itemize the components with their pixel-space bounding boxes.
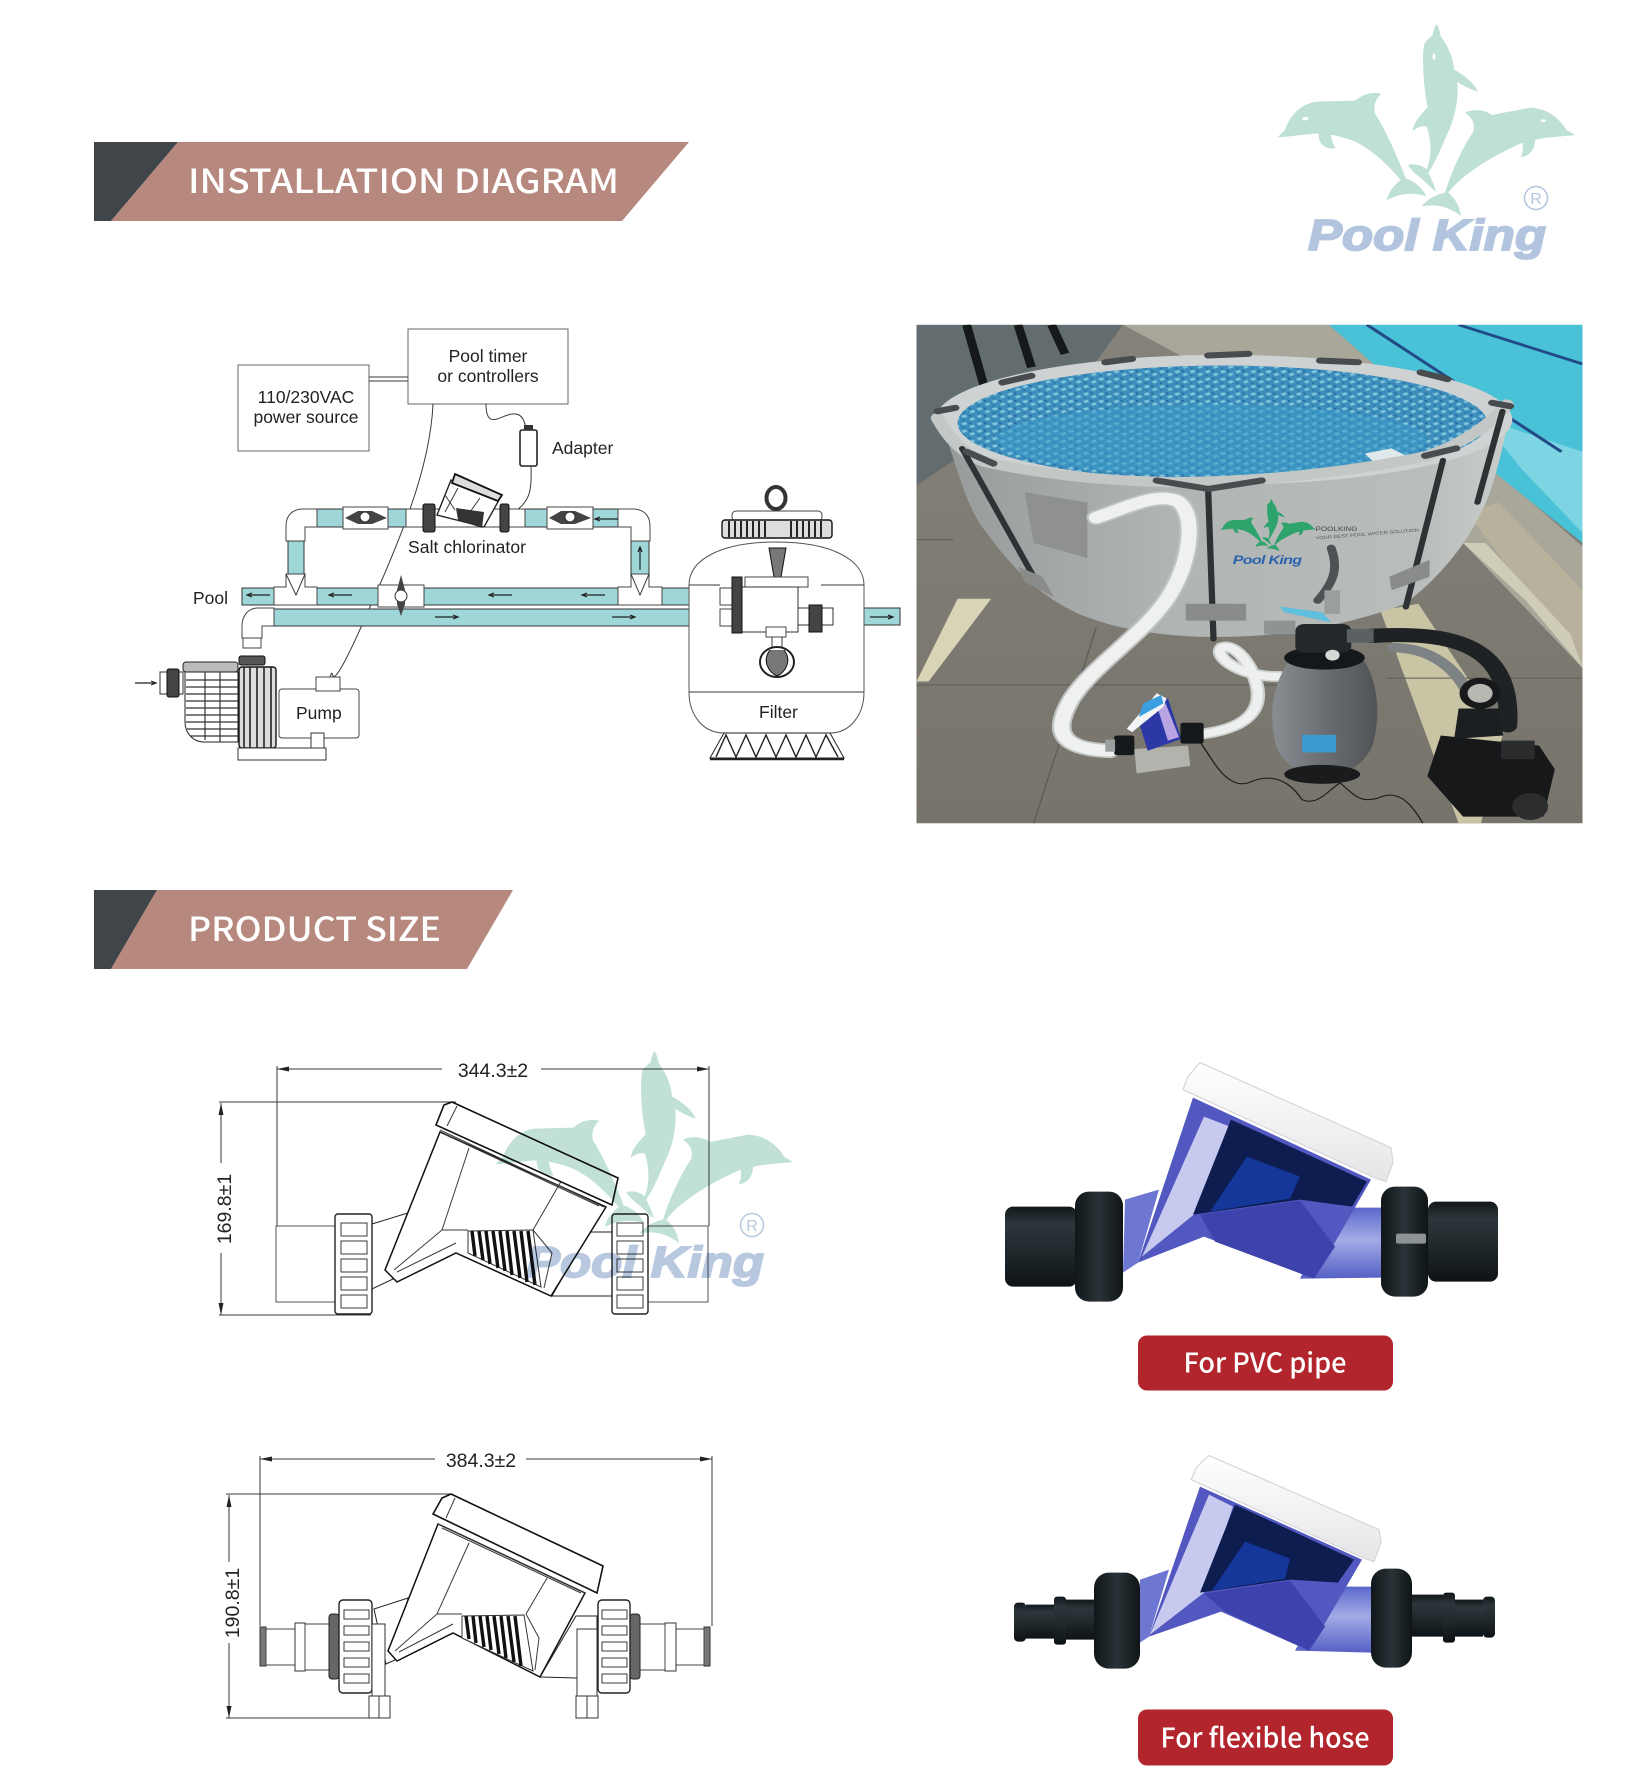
width dimension xyxy=(277,1060,709,1226)
adapter xyxy=(517,425,613,510)
product photo: PVC pipe version xyxy=(1005,1063,1498,1302)
pump: Pump xyxy=(296,703,342,723)
pump in photo xyxy=(1427,678,1555,820)
box: pool timer or controllers xyxy=(408,329,568,404)
watermark: Pool King logo over drawing: R xyxy=(746,1218,758,1235)
label: for flexible hose xyxy=(1138,1710,1393,1766)
flow arrows xyxy=(135,517,893,685)
dimension drawing: flexible hose version xyxy=(222,1450,712,1718)
hoses xyxy=(1062,498,1508,751)
filter xyxy=(689,487,864,759)
salt chlorinator in photo xyxy=(1105,693,1204,773)
icon: three dolphins xyxy=(1277,24,1575,216)
dimension drawing: PVC pipe version xyxy=(214,1060,709,1315)
pool water xyxy=(958,366,1487,480)
height dimension xyxy=(222,1494,451,1718)
filter: Filter xyxy=(759,702,798,722)
label: for flexible hose: For flexible hose xyxy=(1160,1716,1370,1756)
box: pool timer or controllers: Pool timer xyxy=(449,346,528,366)
small salt chlorinator: Salt chlorinator xyxy=(408,537,526,557)
installation schematic xyxy=(135,329,900,760)
valves xyxy=(343,507,593,616)
watermark: Pool King logo over drawing xyxy=(495,1051,793,1287)
product outline xyxy=(276,1102,708,1314)
pool rim back xyxy=(935,355,1512,485)
pool wall xyxy=(946,408,1510,637)
wire: controller to adapter xyxy=(486,404,526,430)
box: power source: 110/230VAC xyxy=(258,387,354,407)
logo on pool wall xyxy=(1220,499,1420,567)
width dimension: 384.3±2 xyxy=(446,1450,516,1472)
product photo: flexible hose version xyxy=(1014,1456,1495,1669)
label: pool: Pool xyxy=(193,588,228,608)
heading: installation diagram: INSTALLATION DIAGRAM xyxy=(188,155,619,203)
width dimension: 344.3±2 xyxy=(458,1060,528,1082)
watermark: Pool King logo over drawing: Pool King xyxy=(526,1238,764,1287)
logo: Pool King top right xyxy=(1277,24,1575,260)
registered mark: R xyxy=(1530,191,1542,208)
box: power source: power source xyxy=(253,407,359,427)
label: for PVC pipe: For PVC pipe xyxy=(1184,1342,1346,1380)
photo: installed above-ground pool xyxy=(916,325,1583,823)
height dimension: 169.8±1 xyxy=(214,1174,236,1244)
height dimension xyxy=(214,1102,456,1315)
logo wordmark: Pool King xyxy=(1308,211,1546,260)
sand filter xyxy=(1264,590,1377,784)
main pipes xyxy=(242,574,900,648)
heading: product size xyxy=(94,890,513,969)
heading: product size: PRODUCT SIZE xyxy=(188,903,441,951)
box: pool timer or controllers: or controllers xyxy=(437,366,539,386)
floor and surroundings xyxy=(916,325,1583,823)
small salt chlorinator xyxy=(406,474,526,557)
wire: controller to pump xyxy=(330,404,433,677)
height dimension: 190.8±1 xyxy=(222,1568,244,1638)
leg straps xyxy=(1018,560,1430,621)
power cord xyxy=(1199,741,1423,823)
pump xyxy=(160,656,359,760)
logo on pool wall: YOUR BEST POOL WATER SOLUTION xyxy=(1315,528,1420,541)
logo on pool wall: Pool King xyxy=(1233,554,1302,567)
width dimension xyxy=(260,1450,712,1626)
box: power source xyxy=(238,365,369,451)
pool frame xyxy=(938,354,1510,639)
label: for PVC pipe xyxy=(1138,1336,1393,1390)
pool warning sticker xyxy=(1025,492,1087,558)
product outline xyxy=(260,1494,710,1718)
logo on pool wall: POOLKING xyxy=(1315,526,1358,533)
heading: installation diagram xyxy=(94,142,689,221)
adapter: Adapter xyxy=(552,438,613,458)
pipe loop: salt chlorinator bypass xyxy=(286,509,650,574)
registered mark xyxy=(1524,186,1548,210)
